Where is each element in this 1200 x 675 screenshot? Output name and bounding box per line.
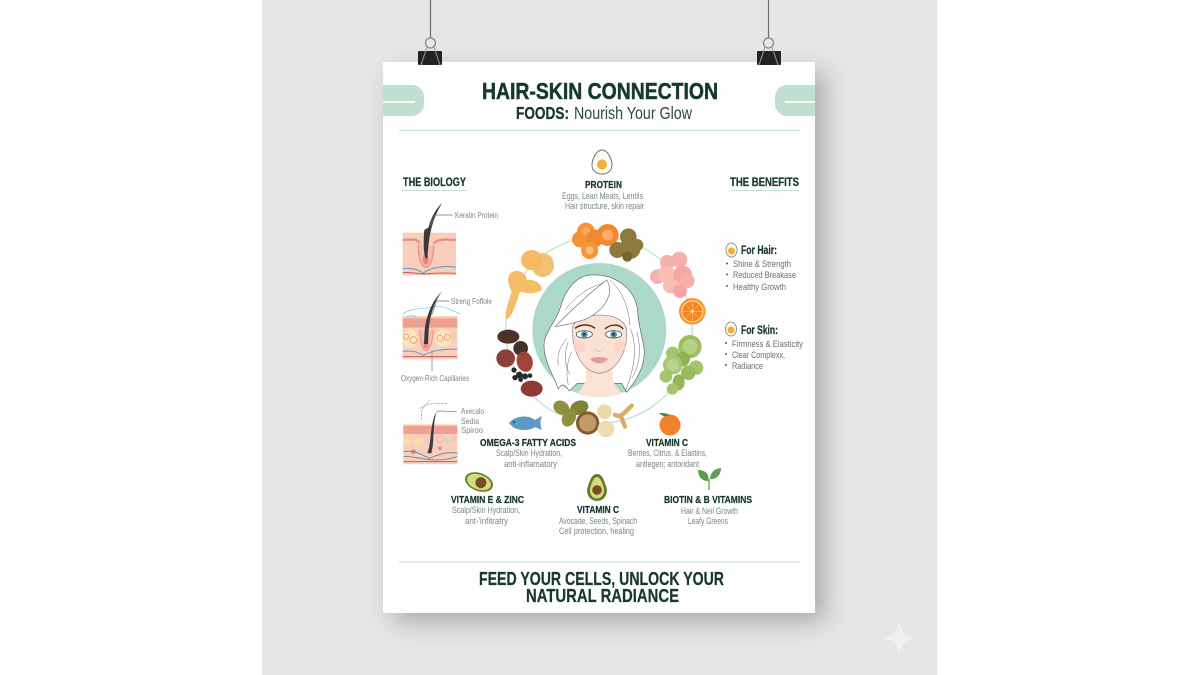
vitamin e and zinc block <box>451 494 524 527</box>
icon: fish <box>509 416 542 430</box>
biology diagram 3: nutrients to scalp <box>403 400 484 464</box>
vitamin c right block <box>628 437 707 470</box>
heading: the benefits: THE BENEFITS <box>730 177 799 189</box>
protein text: Hair structure, skin repair <box>565 201 644 212</box>
heading: the biology: THE BIOLOGY <box>403 177 466 189</box>
list: Reduced Breakase <box>733 270 796 280</box>
icon: egg <box>592 150 612 174</box>
icon: avocado upright <box>587 474 607 501</box>
closing tagline: FEED YOUR CELLS, UNLOCK YOUR <box>479 569 724 589</box>
icon: avocado half <box>462 469 496 495</box>
food: brown nuts <box>609 228 643 262</box>
icon: leaves <box>698 468 721 490</box>
portrait <box>544 275 644 397</box>
protein text: Eggs, Lean Meats, Lentils <box>562 191 643 202</box>
list <box>725 339 803 371</box>
vitamin c center block: Cell protection, healing <box>559 526 634 537</box>
icon: sparkle watermark <box>883 621 915 654</box>
biology diagram 2: strong follicle <box>401 292 492 383</box>
list: Healthy Growth <box>733 282 786 292</box>
poster sheet <box>383 62 815 613</box>
ring <box>506 237 692 423</box>
omega-3 block: anti-inflamatory <box>504 459 557 470</box>
icon: egg <box>726 322 736 336</box>
omega-3 block <box>480 437 576 470</box>
hanging wire and clip right <box>757 0 781 65</box>
left green tab <box>383 85 424 116</box>
list <box>726 259 796 292</box>
protein label: PROTEIN <box>585 179 622 191</box>
subtitle: FOODS: <box>516 103 569 123</box>
label list <box>461 406 484 435</box>
teal circle <box>532 263 666 397</box>
food: green cluster <box>660 335 703 395</box>
label list: Spiroo <box>461 425 483 435</box>
heading: For Hair: <box>741 243 777 257</box>
biotin block: BIOTIN & B VITAMINS <box>664 494 752 506</box>
list: Radiance <box>732 361 763 371</box>
wall background <box>262 0 937 675</box>
food: dark beans and berries <box>496 330 543 397</box>
biotin block: Leafy Greens <box>688 516 728 527</box>
heading: For Skin: <box>741 323 778 337</box>
omega-3 block: Scalp/Skin Hydration, <box>496 448 562 459</box>
biotin block: Hair & Neil Growth <box>681 506 738 517</box>
biology diagram 1: keratin protein <box>403 203 498 275</box>
vitamin c right block: VITAMIN C <box>646 437 688 449</box>
food: orange slice <box>679 298 706 325</box>
list: Firmness & Elasticity <box>732 339 803 349</box>
omega-3 block: OMEGA-3 FATTY ACIDS <box>480 437 576 449</box>
label list: Sedia <box>461 416 479 426</box>
food: seeds and pods <box>551 398 632 437</box>
title: HAIR-SKIN CONNECTION <box>482 78 718 104</box>
label: Keratin Protein <box>455 210 498 220</box>
vitamin c center block <box>559 504 637 537</box>
protein block <box>562 150 644 212</box>
food: pink cluster <box>650 252 695 298</box>
subtitle: Nourish Your Glow <box>574 103 692 123</box>
hanging wire and clip left <box>418 0 442 65</box>
list: Clear Complexx, <box>732 350 785 360</box>
benefits: for skin <box>725 322 803 371</box>
label: follicle: Streng Foffole <box>451 296 492 306</box>
vitamin c center block: Avocade, Seeds, Spinach <box>559 516 637 527</box>
benefits: for hair <box>726 243 796 292</box>
vitamin e and zinc block: VITAMIN E & ZINC <box>451 494 524 506</box>
icon: orange <box>659 413 680 436</box>
list: Shine & Strength <box>733 259 791 269</box>
closing tagline <box>479 569 724 606</box>
vitamin e and zinc block: Scalp/Skin Hydration, <box>452 505 520 516</box>
central food ring <box>496 223 706 437</box>
vitamin c right block: antlegen; antoridant <box>636 459 699 470</box>
food: golden mushrooms <box>506 250 554 320</box>
closing tagline: NATURAL RADIANCE <box>526 586 679 606</box>
poster drop shadow <box>393 72 825 622</box>
vitamin e and zinc block: ant-'infitratry <box>465 516 508 527</box>
icon: egg <box>726 243 737 257</box>
subtitle <box>516 103 692 123</box>
biotin block <box>664 494 752 527</box>
protein text <box>562 191 644 212</box>
food: orange carrots <box>572 223 619 259</box>
label list: Avecalo <box>461 406 484 416</box>
right green tab <box>775 85 815 116</box>
label: capillaries: Oxygen-Rich Capillaries <box>401 373 469 383</box>
vitamin c right block: Berries, Citrus. & Elastins, <box>628 448 707 459</box>
vitamin c center block: VITAMIN C <box>577 504 619 516</box>
